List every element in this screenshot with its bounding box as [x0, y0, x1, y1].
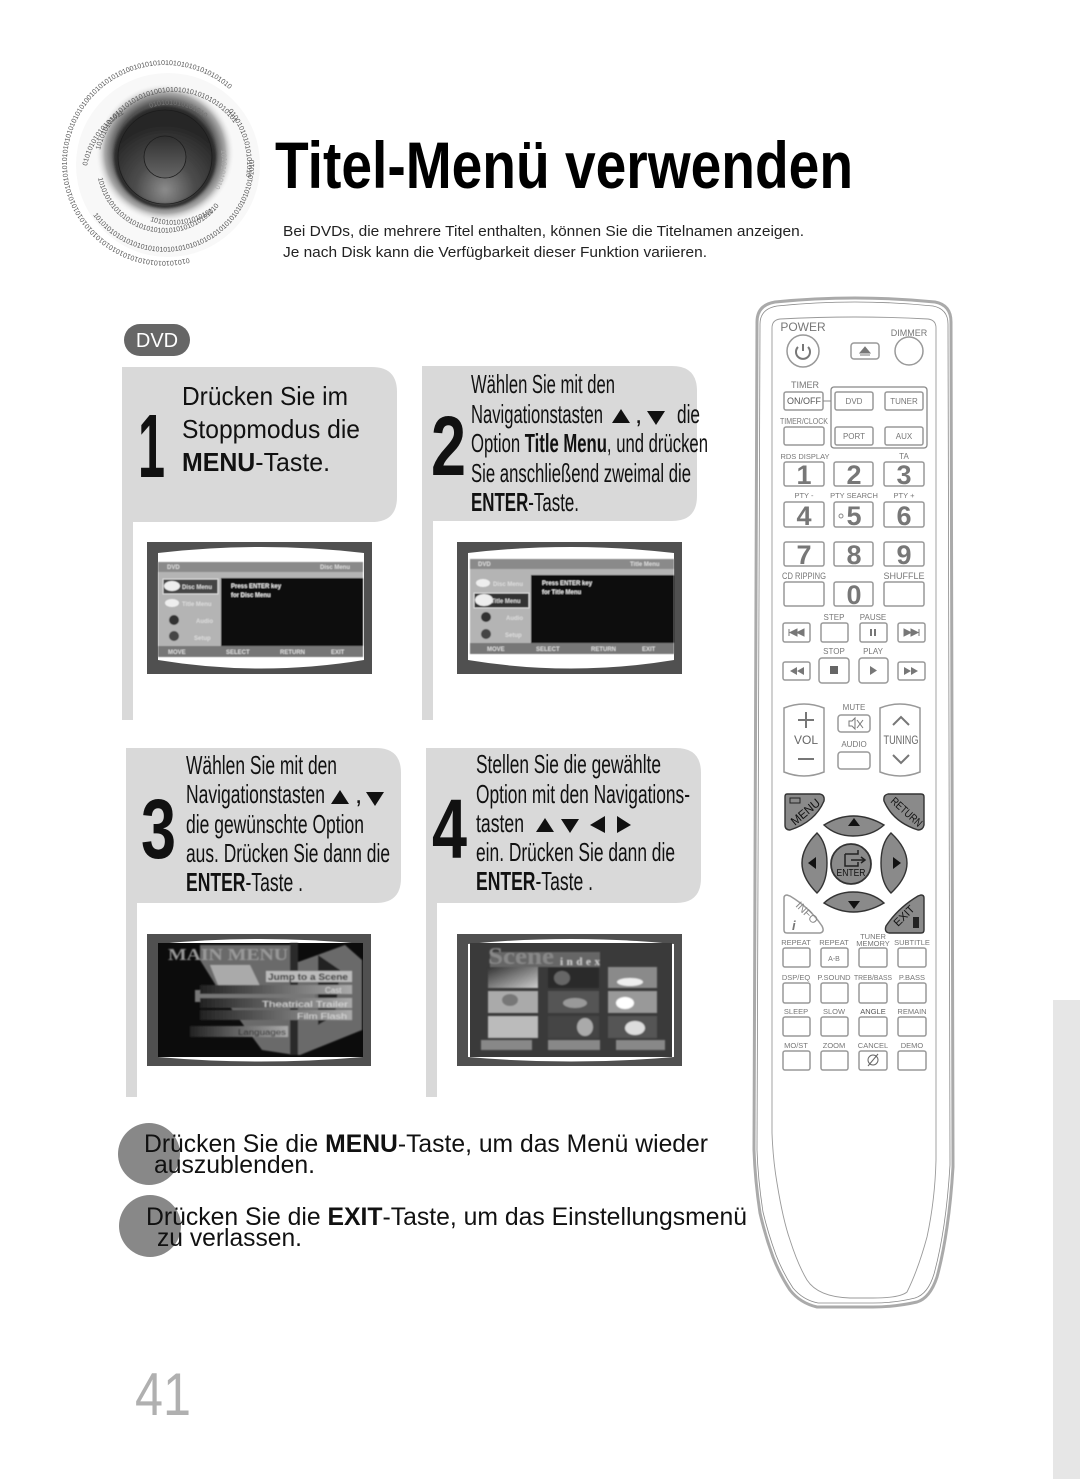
volume, mute and tuning: VOL — [794, 733, 818, 747]
navigation cluster: EXIT — [892, 903, 918, 929]
step 1 text — [182, 381, 360, 477]
timer and source section: AUX — [896, 432, 913, 441]
screen: title menu — [457, 542, 682, 674]
icon: speaker with binary rings: 1010101010 — [216, 150, 227, 190]
transport keys: PLAY — [863, 647, 884, 656]
number keys: 9 — [896, 540, 912, 570]
DVD badge — [124, 324, 190, 356]
screen: disc menu: Setup — [194, 636, 211, 642]
screen: disc menu: Audio — [196, 619, 213, 625]
screen: disc menu: DVD — [167, 565, 180, 571]
volume, mute and tuning: TUNING — [884, 735, 919, 747]
screen: disc menu: Press ENTER key — [231, 584, 282, 590]
transport keys — [783, 613, 925, 683]
screen: main menu — [147, 934, 371, 1066]
step 3 text: ENTER-Taste . — [186, 867, 303, 897]
step 2 text — [471, 369, 708, 517]
step 4 text: Option mit den Navigations- — [476, 779, 690, 809]
lower function keys: REPEAT — [819, 938, 849, 947]
DVD badge: DVD — [136, 330, 178, 352]
bullet circle 2 — [119, 1195, 181, 1257]
screen: title menu: MOVE — [487, 647, 505, 653]
note: exit key — [119, 1195, 747, 1257]
lower function keys: DSP/EQ — [782, 973, 810, 982]
screen: title menu: Title Menu — [630, 562, 660, 568]
timer and source section: TIMER/CLOCK — [780, 416, 828, 426]
number keys: RDS DISPLAY — [780, 452, 830, 461]
transport keys: STEP — [824, 613, 844, 622]
number keys: 1 — [796, 460, 812, 490]
screen: disc menu: MOVE — [168, 650, 186, 656]
navigation cluster: i — [792, 918, 796, 933]
step 2 text: Option Title Menu, und drücken — [471, 428, 708, 458]
icon: speaker with binary rings: 0101010101010101010101010101010101010101010101010101010101010100101010101010010101010101010101010101010101010101011 — [62, 60, 232, 266]
lower function keys: SLOW — [823, 1007, 846, 1016]
intro text: Je nach Disk kann die Verfügbarkeit dieser Funktion variieren. — [283, 244, 707, 261]
number keys: PTY SEARCH — [830, 491, 878, 500]
step 1 text: Stoppmodus die — [182, 414, 360, 444]
note: menu key — [118, 1123, 708, 1185]
lower function keys: DEMO — [901, 1041, 923, 1050]
step 3 text: , — [355, 779, 362, 809]
screen: main menu: Film Flash — [297, 1012, 347, 1021]
screen: title menu: SELECT — [536, 647, 560, 653]
screen: title menu: Setup — [505, 633, 522, 639]
timer and source section — [780, 380, 927, 448]
navigation cluster: ENTER — [836, 868, 866, 879]
power section: POWER — [780, 320, 826, 334]
step number 1: 1 — [138, 397, 165, 497]
screen: title menu: DVD — [478, 562, 491, 568]
step 4 text: ENTER-Taste . — [476, 866, 593, 896]
step 3 text — [186, 750, 390, 897]
icon: speaker with binary rings: 1010101010101010101010101010101010101010101010101010101010 — [93, 160, 254, 252]
timer and source section: TIMER — [791, 380, 819, 390]
note 1 text: auszublenden. — [154, 1151, 315, 1179]
step 4 text: Stellen Sie die gewählte — [476, 749, 661, 779]
step 3 text: Navigationstasten — [186, 779, 325, 809]
lower function keys: SLEEP — [784, 1007, 808, 1016]
volume, mute and tuning: MUTE — [843, 703, 865, 712]
lower function keys — [781, 932, 930, 1070]
screen: title menu: Disc Menu — [493, 582, 523, 588]
screen: disc menu: EXIT — [331, 650, 345, 656]
transport keys: STOP — [823, 647, 845, 656]
step 4 text: ein. Drücken Sie dann die — [476, 837, 675, 867]
title: Titel-Menü verwenden — [275, 128, 853, 202]
remote body — [754, 298, 953, 1307]
number keys — [780, 452, 925, 610]
lower function keys: P.BASS — [899, 973, 925, 982]
number keys: 7 — [796, 540, 812, 570]
screen: main menu: Languages — [238, 1028, 286, 1037]
step 2 text: Wählen Sie mit den — [471, 369, 615, 399]
lower function keys: ZOOM — [823, 1041, 845, 1050]
step 1 text: Drücken Sie im — [182, 381, 348, 411]
screen: title menu: Press ENTER key — [542, 581, 593, 587]
step 1 text: MENU-Taste. — [182, 447, 330, 477]
lower function keys: TREB/BASS — [854, 973, 892, 982]
screen: main menu: Theatrical Trailer — [262, 1000, 348, 1009]
screen: disc menu: Disc Menu — [182, 585, 212, 591]
step 2 text: ENTER-Taste. — [471, 487, 579, 517]
lower function keys: TUNER — [860, 932, 886, 941]
step 4 text — [476, 749, 690, 896]
screen: scene index: index — [560, 956, 600, 968]
lower function keys: REPEAT — [781, 938, 811, 947]
screen: disc menu: RETURN — [280, 650, 305, 656]
note 2 text: zu verlassen. — [157, 1224, 302, 1252]
screen: title menu: RETURN — [591, 647, 616, 653]
screen: disc menu: Title Menu — [182, 602, 212, 608]
step 3 text: Wählen Sie mit den — [186, 750, 337, 780]
lower function keys: MO/ST — [784, 1041, 808, 1050]
side tab — [1053, 1000, 1080, 1479]
volume, mute and tuning — [784, 703, 920, 776]
intro text — [283, 223, 804, 261]
number keys: PTY - — [794, 491, 814, 500]
timer and source section: ON/OFF — [787, 396, 821, 406]
navigation cluster: MENU — [788, 796, 823, 828]
number keys: TA — [899, 452, 909, 461]
screen: disc menu: for Disc Menu — [231, 593, 271, 599]
step 2 text: , — [635, 399, 642, 429]
number keys: 0 — [846, 580, 862, 610]
power section: DIMMER — [891, 328, 928, 338]
step 2 text: die — [677, 399, 700, 429]
number keys: 6 — [896, 501, 912, 531]
intro text: Bei DVDs, die mehrere Titel enthalten, können Sie die Titelnamen anzeigen. — [283, 223, 804, 240]
icon: speaker with binary rings: 10101010101010101010100101010101010101010101 — [96, 87, 237, 150]
lower function keys: MEMORY — [856, 939, 890, 948]
lower function keys: CANCEL — [858, 1041, 888, 1050]
note 1 text — [144, 1130, 708, 1179]
panel: step 3 — [126, 748, 401, 1097]
screen: disc menu: SELECT — [226, 650, 250, 656]
step number 4: 4 — [432, 782, 467, 876]
transport keys: PAUSE — [860, 613, 886, 622]
screen: disc menu: Disc Menu — [320, 565, 350, 571]
remote control — [754, 298, 953, 1307]
step 2 text: Sie anschließend zweimal die — [471, 458, 691, 488]
navigation cluster: RETURN — [888, 795, 924, 830]
step 3 text: die gewünschte Option — [186, 809, 364, 839]
screen: main menu: MAIN MENU — [168, 945, 288, 964]
number keys: 3 — [896, 460, 912, 490]
lower function keys: REMAIN — [897, 1007, 927, 1016]
timer and source section: DVD — [846, 397, 863, 406]
volume, mute and tuning: AUDIO — [841, 740, 867, 749]
icon: speaker with binary rings: 1010101010101010101010101010101010101010 — [98, 178, 218, 233]
lower function keys: ANGLE — [860, 1007, 886, 1016]
lower function keys: P.SOUND — [817, 973, 851, 982]
screen: main menu: Cast — [325, 986, 342, 995]
lower function keys: SUBTITLE — [894, 938, 930, 947]
number keys: 8 — [846, 540, 862, 570]
number keys: 2 — [846, 460, 862, 490]
screen: title menu: for Title Menu — [542, 590, 582, 596]
number keys: 4 — [796, 501, 812, 531]
screen: disc menu — [147, 542, 372, 674]
panel: step 1 — [122, 367, 397, 720]
screen: title menu: EXIT — [642, 647, 656, 653]
lower function keys: A-B — [828, 956, 840, 963]
step 3 text: aus. Drücken Sie dann die — [186, 838, 390, 868]
navigation cluster: INFO — [793, 900, 820, 927]
step 4 text: tasten — [476, 808, 524, 838]
bullet circle 1 — [118, 1123, 180, 1185]
navigation cluster — [784, 794, 924, 933]
note 1 text: Drücken Sie die MENU-Taste, um das Menü wieder — [144, 1130, 708, 1158]
step number 3: 3 — [141, 782, 176, 876]
screen: title menu: Title Menu — [491, 599, 521, 605]
number keys: 5 — [846, 501, 862, 531]
power section — [780, 320, 928, 367]
note 2 text: Drücken Sie die EXIT-Taste, um das Einstellungsmenü — [146, 1203, 747, 1231]
panel: step 4 — [426, 748, 701, 1097]
number keys: PTY + — [894, 491, 915, 500]
screen: scene index: Scene — [488, 944, 554, 970]
screen: scene index — [457, 934, 682, 1066]
icon: speaker with binary rings: 01010101010101011 — [82, 110, 124, 166]
panel: step 2 — [422, 366, 708, 720]
note 2 text — [146, 1203, 747, 1252]
screen: main menu: Jump to a Scene — [268, 972, 348, 982]
screen: title menu: Audio — [506, 616, 523, 622]
timer and source section: PORT — [843, 432, 865, 441]
step number 2: 2 — [431, 399, 466, 493]
icon: speaker with binary rings — [62, 60, 254, 266]
page number: 41 — [135, 1361, 191, 1428]
number keys: SHUFFLE — [883, 571, 925, 581]
step 2 text: Navigationstasten — [471, 399, 603, 429]
number keys: CD RIPPING — [782, 571, 826, 581]
timer and source section: TUNER — [890, 397, 918, 406]
